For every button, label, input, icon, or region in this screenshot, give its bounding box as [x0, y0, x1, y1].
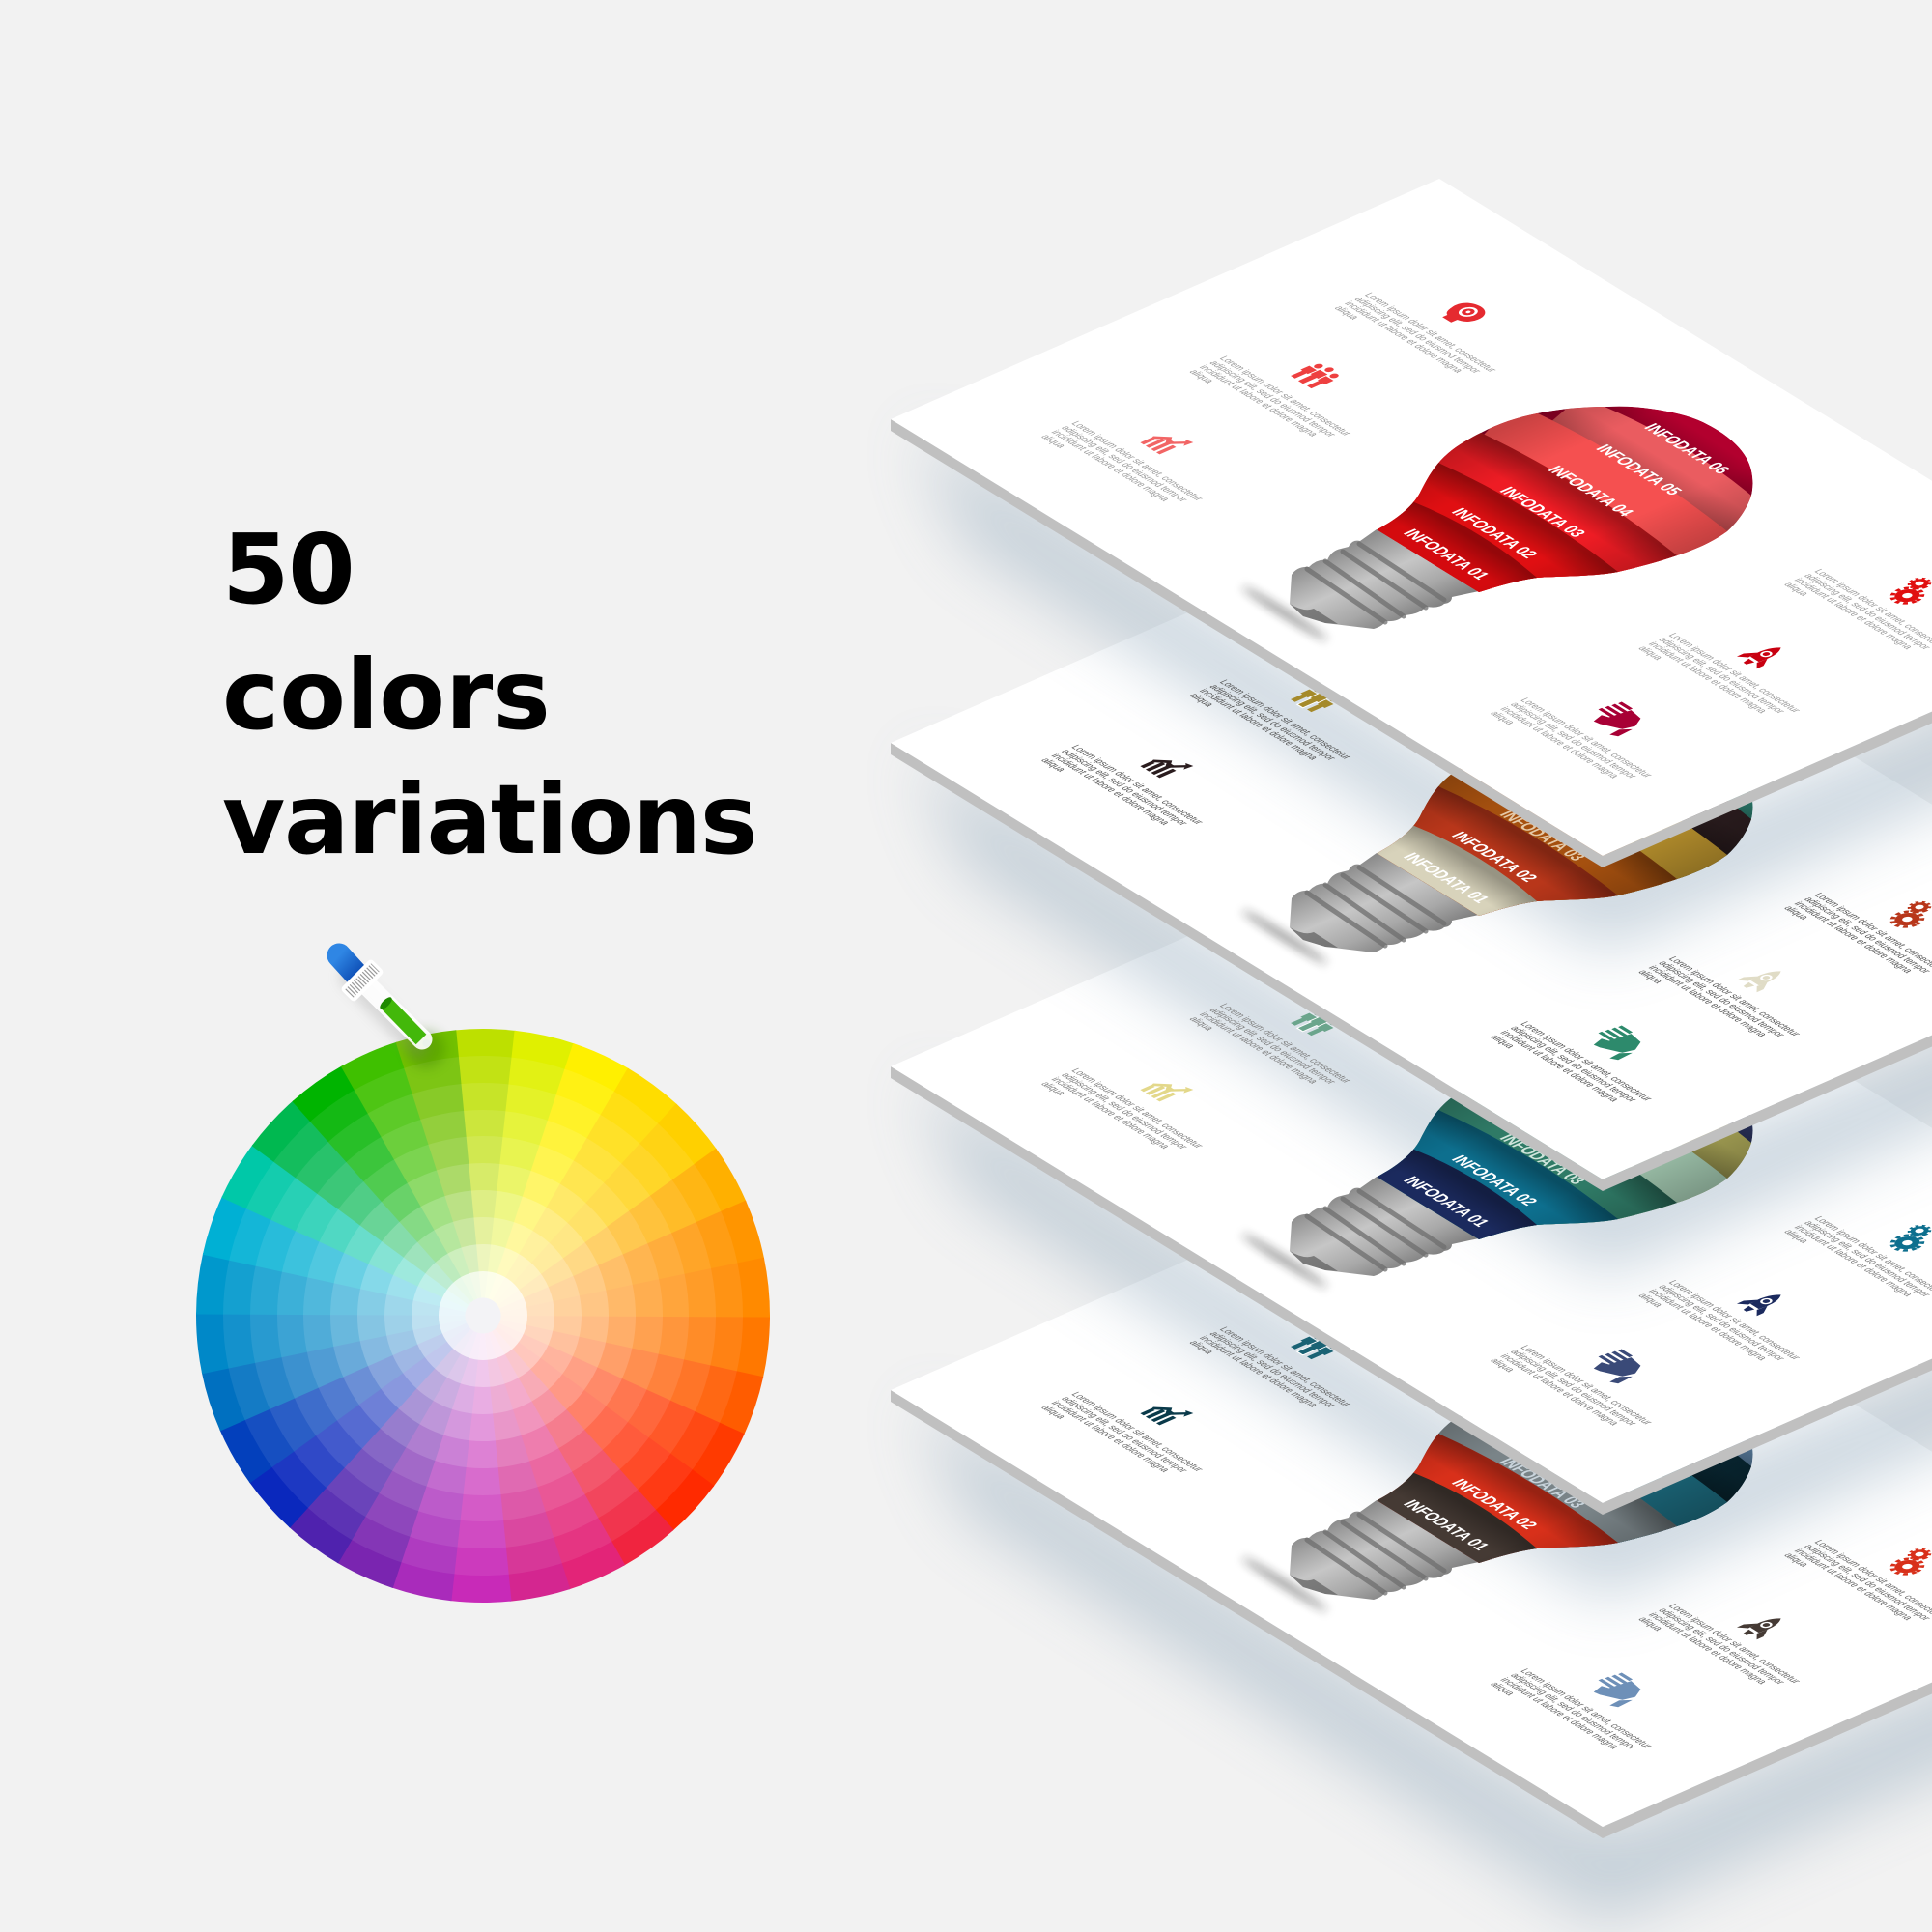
- slide content: Lorem ipsum dolor sit amet, consectetur: [1068, 1391, 1206, 1473]
- lightbulb chart: [1240, 393, 1773, 773]
- slide content: adipiscing elit, sed do eiusmod tempor: [1656, 637, 1787, 716]
- slide content: incididunt ut labore et dolore magna: [1497, 1676, 1621, 1750]
- slide content: incididunt ut labore et dolore magna: [1645, 640, 1770, 715]
- panel: slide variation 4 (bottom): [891, 1077, 1932, 1922]
- slide content: Lorem ipsum dolor sit amet, consectetur: [1216, 679, 1354, 761]
- slide content: INFODATA 03: [1495, 485, 1590, 540]
- slide content: aliqua: [1186, 1339, 1216, 1355]
- slide content: incididunt ut labore et dolore magna: [1497, 705, 1621, 780]
- slide content: aliqua: [1781, 905, 1811, 922]
- slide content: adipiscing elit, sed do eiusmod tempor: [1801, 895, 1932, 975]
- slide content: Lorem ipsum dolor sit amet, consectetur: [1665, 1279, 1804, 1362]
- slide content: aliqua: [1635, 645, 1665, 662]
- slide content: Lorem ipsum dolor sit amet, consectetur: [1216, 355, 1354, 438]
- icon: people: [1288, 360, 1345, 390]
- icon: people: [1288, 684, 1345, 714]
- slide content: aliqua: [1487, 1357, 1518, 1374]
- slide content: Lorem ipsum dolor sit amet, consectetur: [1518, 696, 1655, 780]
- slide content: INFODATA 02: [1447, 1152, 1542, 1208]
- slide content: Lorem ipsum dolor sit amet, consectetur: [1665, 955, 1804, 1038]
- slide content: adipiscing elit, sed do eiusmod tempor: [1207, 359, 1339, 439]
- slide content: incididunt ut labore et dolore magna: [1341, 300, 1465, 375]
- slide content: Lorem ipsum dolor sit amet, consectetur: [1216, 1326, 1354, 1408]
- slide content: incididunt ut labore et dolore magna: [1196, 1335, 1321, 1409]
- slide content: adipiscing elit, sed do eiusmod tempor: [1801, 1219, 1932, 1298]
- slide content: adipiscing elit, sed do eiusmod tempor: [1656, 1607, 1787, 1687]
- slide content: INFODATA 02: [1447, 829, 1542, 884]
- slide content: aliqua: [1487, 1681, 1518, 1697]
- icon: hands: [1581, 1024, 1653, 1062]
- slide content: Lorem ipsum dolor sit amet, consectetur: [1518, 1020, 1655, 1103]
- slide content: [1037, 917, 1932, 1439]
- slide content: incididunt ut labore et dolore magna: [1497, 1029, 1621, 1103]
- slide content: Lorem ipsum dolor sit amet, consectetur: [1068, 420, 1206, 502]
- icon: people: [1288, 1008, 1345, 1037]
- icon: rocket: [1735, 641, 1791, 669]
- slide content: aliqua: [1781, 1552, 1811, 1569]
- slide content: Lorem ipsum dolor sit amet, consectetur: [1665, 1603, 1804, 1686]
- slide content: adipiscing elit, sed do eiusmod tempor: [1507, 1349, 1639, 1428]
- slide content: incididunt ut labore et dolore magna: [1048, 429, 1172, 503]
- heading: 50 colors variations: variations: [222, 763, 756, 876]
- slide content: aliqua: [1037, 757, 1068, 774]
- slide content: Lorem ipsum dolor sit amet, consectetur: [1665, 632, 1804, 715]
- icon: hands: [1581, 700, 1653, 738]
- slide content: aliqua: [1186, 692, 1216, 708]
- heading: 50 colors variations: [222, 513, 756, 876]
- slide content: aliqua: [1487, 1034, 1518, 1050]
- slide content: Lorem ipsum dolor sit amet, consectetur: [1361, 292, 1499, 374]
- icon: rocket: [1735, 1289, 1791, 1317]
- slide content: incididunt ut labore et dolore magna: [1497, 1352, 1621, 1427]
- slide content: aliqua: [1331, 304, 1361, 322]
- icon: gears: [1883, 899, 1932, 930]
- icon: gears: [1883, 576, 1932, 607]
- slide content: incididunt ut labore et dolore magna: [1196, 688, 1321, 762]
- slide content: incididunt ut labore et dolore magna: [1196, 1011, 1321, 1086]
- slide content: adipiscing elit, sed do eiusmod tempor: [1507, 1672, 1639, 1751]
- heading: 50 colors variations: colors: [222, 639, 551, 752]
- slide content: [1037, 1240, 1932, 1763]
- lightbulb chart: [1240, 717, 1773, 1096]
- icon: hands: [1581, 1671, 1653, 1709]
- slide content: adipiscing elit, sed do eiusmod tempor: [1058, 1071, 1190, 1151]
- slide content: incididunt ut labore et dolore magna: [1196, 364, 1321, 439]
- slide content: Lorem ipsum dolor sit amet, consectetur: [1068, 1067, 1206, 1150]
- slide content: adipiscing elit, sed do eiusmod tempor: [1207, 1330, 1339, 1409]
- slide content: INFODATA 02: [1447, 505, 1542, 560]
- slide content: incididunt ut labore et dolore magna: [1645, 1288, 1770, 1362]
- slide content: adipiscing elit, sed do eiusmod tempor: [1058, 1395, 1190, 1474]
- slide content: incididunt ut labore et dolore magna: [1645, 1611, 1770, 1686]
- slide content: incididunt ut labore et dolore magna: [1791, 1224, 1915, 1298]
- slide content: adipiscing elit, sed do eiusmod tempor: [1058, 748, 1190, 827]
- slide content: INFODATA 01: [1399, 1174, 1493, 1229]
- slide content: Lorem ipsum dolor sit amet, consectetur: [1068, 744, 1206, 826]
- colour wheel: [223, 1030, 743, 1576]
- slide content: aliqua: [1186, 368, 1216, 384]
- slide content: aliqua: [1186, 1015, 1216, 1032]
- slide content: INFODATA 03: [1495, 809, 1590, 864]
- slide content: INFODATA 01: [1399, 526, 1493, 582]
- slide content: INFODATA 04: [1543, 464, 1638, 519]
- icon: gears: [1883, 1547, 1932, 1577]
- icon: rocket: [1735, 965, 1791, 993]
- panel: slide variation 1 (top, red): [891, 179, 1932, 867]
- slide content: adipiscing elit, sed do eiusmod tempor: [1207, 683, 1339, 762]
- slide content: incididunt ut labore et dolore magna: [1048, 1400, 1172, 1474]
- icon: eyedropper: [339, 955, 431, 1047]
- icon: chart: [1140, 1076, 1193, 1103]
- slide content: aliqua: [1781, 582, 1811, 598]
- slide content: aliqua: [1037, 1405, 1068, 1421]
- icon: chart: [1140, 429, 1193, 456]
- slide content: aliqua: [1487, 710, 1518, 726]
- lightbulb chart: [1240, 1364, 1773, 1744]
- icon: gears: [1883, 1223, 1932, 1254]
- slide content: Lorem ipsum dolor sit amet, consectetur: [1216, 1003, 1354, 1085]
- slide content: adipiscing elit, sed do eiusmod tempor: [1207, 1007, 1339, 1086]
- slide content: incididunt ut labore et dolore magna: [1048, 753, 1172, 827]
- slide content: adipiscing elit, sed do eiusmod tempor: [1801, 572, 1932, 651]
- icon: chart: [1140, 1400, 1193, 1427]
- slide content: incididunt ut labore et dolore magna: [1791, 1548, 1915, 1622]
- panel: slide variation 2: [891, 430, 1932, 1191]
- icon: head with gear: [1436, 299, 1492, 327]
- icon: rocket: [1735, 1612, 1791, 1640]
- slide content: incididunt ut labore et dolore magna: [1645, 964, 1770, 1038]
- slide content: aliqua: [1635, 1293, 1665, 1309]
- slide content: aliqua: [1037, 434, 1068, 450]
- slide content: [1037, 593, 1932, 1116]
- slide content: adipiscing elit, sed do eiusmod tempor: [1656, 960, 1787, 1039]
- slide content: INFODATA 02: [1447, 1476, 1542, 1531]
- slide content: INFODATA 03: [1495, 1132, 1590, 1187]
- slide content: aliqua: [1635, 969, 1665, 985]
- slide content: INFODATA 03: [1495, 1456, 1590, 1511]
- slide content: adipiscing elit, sed do eiusmod tempor: [1507, 701, 1639, 781]
- slide content: INFODATA 06: [1639, 421, 1735, 476]
- slide content: incididunt ut labore et dolore magna: [1048, 1076, 1172, 1151]
- icon: hands: [1581, 1348, 1653, 1385]
- icon: chart: [1140, 753, 1193, 780]
- slide content: aliqua: [1037, 1081, 1068, 1097]
- slide content: [1037, 270, 1932, 792]
- slide content: adipiscing elit, sed do eiusmod tempor: [1058, 424, 1190, 503]
- icon: people: [1288, 1331, 1345, 1361]
- panel: slide variation 3: [891, 753, 1932, 1515]
- slide content: aliqua: [1635, 1616, 1665, 1633]
- slide content: adipiscing elit, sed do eiusmod tempor: [1801, 1543, 1932, 1622]
- slide content: INFODATA 05: [1591, 442, 1687, 497]
- heading: 50 colors variations: 50: [222, 513, 354, 626]
- slide content: aliqua: [1781, 1229, 1811, 1245]
- slide content: INFODATA 01: [1399, 850, 1493, 905]
- slide content: incididunt ut labore et dolore magna: [1791, 577, 1915, 651]
- slide content: Lorem ipsum dolor sit amet, consectetur: [1518, 1344, 1655, 1427]
- slide content: incididunt ut labore et dolore magna: [1791, 900, 1915, 975]
- slide content: adipiscing elit, sed do eiusmod tempor: [1656, 1284, 1787, 1363]
- lightbulb chart: [1240, 1040, 1773, 1420]
- slide content: adipiscing elit, sed do eiusmod tempor: [1507, 1025, 1639, 1104]
- slide content: INFODATA 01: [1399, 1497, 1493, 1552]
- slide content: Lorem ipsum dolor sit amet, consectetur: [1518, 1667, 1655, 1750]
- slide content: adipiscing elit, sed do eiusmod tempor: [1351, 296, 1484, 375]
